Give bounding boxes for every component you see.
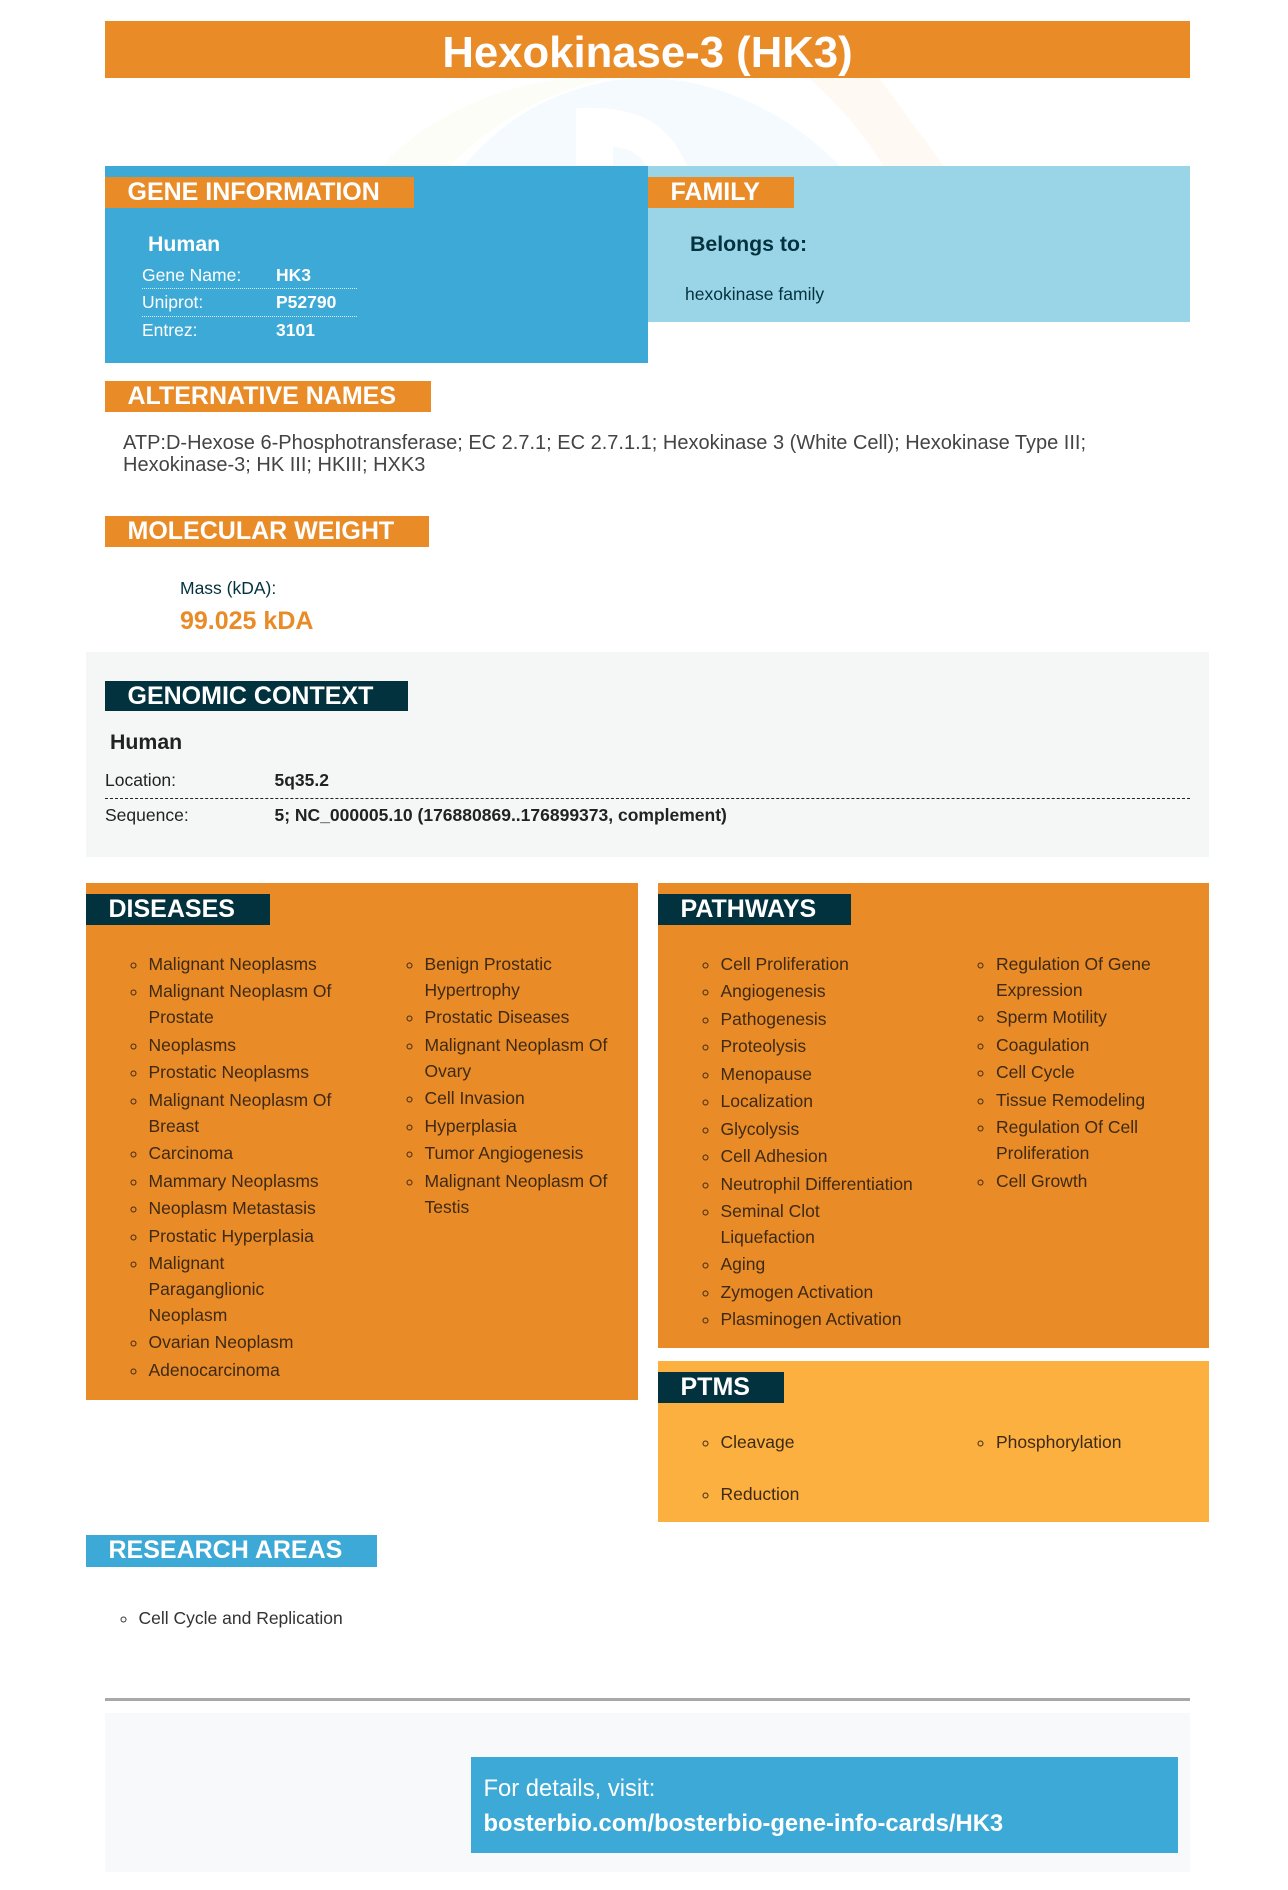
heading: pathways — [658, 894, 851, 925]
ptms list column 1: Cleavage — [720, 1432, 794, 1452]
species label: Human — [110, 730, 182, 754]
pathways list column 1: Cell Adhesion — [720, 1146, 828, 1166]
diseases list column 2: Prostatic Diseases — [424, 1007, 569, 1027]
uniprot row: P52790 — [276, 292, 336, 312]
heading: pathways: PATHWAYS — [680, 895, 816, 923]
research areas list: Cell Cycle and Replication — [138, 1608, 343, 1628]
pathways list column 2: Regulation Of Cell Proliferation — [996, 1117, 1138, 1163]
callout: details link — [471, 1757, 1178, 1853]
location row — [105, 768, 1190, 799]
pathways list column 2: Cell Growth — [996, 1171, 1087, 1191]
diseases list column 2: Benign Prostatic Hypertrophy — [424, 954, 552, 1000]
alternative names text — [123, 432, 1086, 476]
diseases list column 1: Ovarian Neoplasm — [148, 1332, 293, 1352]
gene name row — [142, 263, 357, 289]
callout label: For details, visit: — [484, 1775, 655, 1802]
species label: Human — [148, 232, 220, 256]
diseases list column 1 — [130, 954, 332, 1380]
diseases list column 1: Malignant Neoplasms — [148, 954, 317, 974]
diseases list column 1: Mammary Neoplasms — [148, 1171, 319, 1191]
pathways list column 1: Plasminogen Activation — [720, 1309, 901, 1329]
pathways list column 1: Glycolysis — [720, 1119, 799, 1139]
panel: pathways — [658, 883, 1209, 1348]
heading: diseases — [86, 894, 270, 925]
title banner — [105, 21, 1190, 78]
watermark logo — [464, 78, 944, 166]
pathways list column 1: Angiogenesis — [720, 981, 826, 1001]
sequence row: Sequence: — [105, 805, 189, 825]
diseases list column 2: Tumor Angiogenesis — [424, 1143, 583, 1163]
pathways list column 2: Coagulation — [996, 1035, 1089, 1055]
pathways list column 2: Sperm Motility — [996, 1007, 1107, 1027]
diseases list column 2: Malignant Neoplasm Of Testis — [424, 1171, 607, 1217]
pathways list column 2: Regulation Of Gene Expression — [996, 954, 1151, 1000]
heading: family — [648, 177, 794, 208]
sequence row: 5; NC_000005.10 (176880869..176899373, complement) — [274, 805, 727, 825]
ptms list column 1 — [702, 1432, 799, 1504]
entrez row: Entrez: — [142, 320, 197, 340]
diseases list column 1: Carcinoma — [148, 1143, 233, 1163]
uniprot row — [142, 290, 357, 317]
alternative names text: Hexokinase-3; HK III; HKIII; HXK3 — [123, 454, 425, 476]
diseases list column 1: Neoplasm Metastasis — [148, 1198, 316, 1218]
pathways list column 1: Localization — [720, 1091, 813, 1111]
diseases list column 1: Neoplasms — [148, 1035, 236, 1055]
diseases list column 2 — [406, 954, 608, 1217]
location row: Location: — [105, 770, 176, 790]
heading: research areas: RESEARCH AREAS — [108, 1536, 342, 1564]
pathways list column 1: Zymogen Activation — [720, 1282, 873, 1302]
heading: diseases: DISEASES — [108, 895, 235, 923]
ptms list column 1: Reduction — [720, 1484, 799, 1504]
diseases list column 1: Malignant Neoplasm Of Breast — [148, 1090, 331, 1136]
entrez row: 3101 — [276, 320, 315, 340]
belongs to label: Belongs to: — [690, 232, 807, 256]
heading: ptms — [658, 1372, 784, 1403]
family name: hexokinase family — [685, 284, 824, 304]
location row: 5q35.2 — [274, 770, 329, 790]
pathways list column 1: Aging — [720, 1254, 765, 1274]
heading: ptms: PTMS — [680, 1373, 750, 1401]
gene name row: HK3 — [276, 265, 311, 285]
title banner: Hexokinase-3 (HK3) — [442, 28, 853, 77]
panel: footer — [105, 1713, 1190, 1872]
entrez row — [142, 320, 315, 340]
heading: family: FAMILY — [670, 178, 760, 206]
pathways list column 1: Cell Proliferation — [720, 954, 849, 974]
gene name row: Gene Name: — [142, 265, 241, 285]
diseases list column 1: Prostatic Hyperplasia — [148, 1226, 314, 1246]
pathways list column 2: Cell Cycle — [996, 1062, 1075, 1082]
heading: genomic context: GENOMIC CONTEXT — [128, 682, 373, 710]
mass label: Mass (kDA): — [180, 578, 276, 598]
pathways list column 1: Seminal Clot Liquefaction — [720, 1201, 820, 1247]
mass value: 99.025 kDA — [180, 607, 313, 635]
pathways list column 2: Tissue Remodeling — [996, 1090, 1145, 1110]
pathways list column 1: Menopause — [720, 1064, 812, 1084]
panel: diseases — [86, 883, 638, 1400]
diseases list column 2: Cell Invasion — [424, 1088, 525, 1108]
uniprot row: Uniprot: — [142, 292, 203, 312]
heading: molecular weight: MOLECULAR WEIGHT — [128, 517, 394, 545]
panel: genomic context — [86, 652, 1209, 857]
pathways list column 2 — [978, 954, 1151, 1191]
diseases list column 1: Prostatic Neoplasms — [148, 1062, 309, 1082]
diseases list column 2: Malignant Neoplasm Of Ovary — [424, 1035, 607, 1081]
diseases list column 1: Adenocarcinoma — [148, 1360, 280, 1380]
pathways list column 1: Pathogenesis — [720, 1009, 827, 1029]
diseases list column 1: Malignant Paraganglionic Neoplasm — [148, 1253, 264, 1325]
callout url: bosterbio.com/bosterbio-gene-info-cards/HK3 — [484, 1810, 1003, 1836]
pathways list column 1: Proteolysis — [720, 1036, 806, 1056]
heading: alternative names: ALTERNATIVE NAMES — [128, 382, 396, 410]
ptms list column 2: Phosphorylation — [996, 1432, 1122, 1452]
footer divider — [105, 1698, 1190, 1701]
pathways list column 1 — [702, 954, 913, 1329]
alternative names text: ATP:D-Hexose 6-Phosphotransferase; EC 2.7.1; EC 2.7.1.1; Hexokinase 3 (White Cell); Hexokinase Type III; — [123, 432, 1086, 454]
heading: gene information: GENE INFORMATION — [128, 178, 380, 206]
panel: gene information — [105, 166, 648, 363]
panel: family — [648, 166, 1190, 322]
diseases list column 2: Hyperplasia — [424, 1116, 517, 1136]
panel: ptms — [658, 1361, 1209, 1522]
pathways list column 1: Neutrophil Differentiation — [720, 1174, 913, 1194]
diseases list column 1: Malignant Neoplasm Of Prostate — [148, 981, 331, 1027]
